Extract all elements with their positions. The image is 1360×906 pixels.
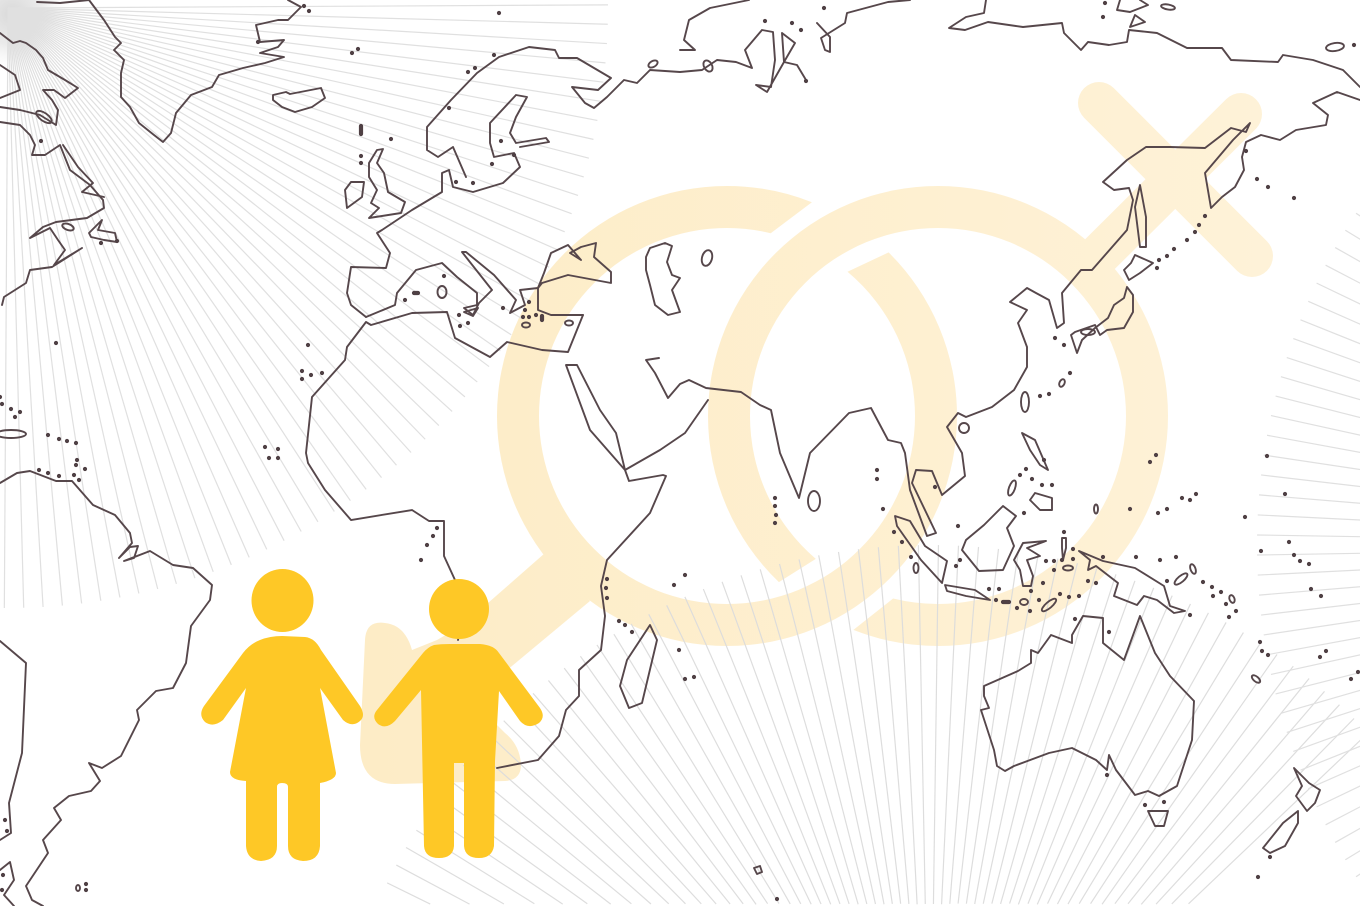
male symbol: [708, 103, 1252, 646]
man figure: [374, 579, 543, 858]
caspian sea: [646, 243, 680, 315]
radial lines fan: right: [1257, 197, 1360, 893]
iceland: [273, 88, 325, 112]
east asia coast with kamchatka: [646, 92, 1360, 536]
north america coast: [0, 0, 117, 305]
radial lines fan: bottom: [387, 545, 1360, 904]
female symbol: [360, 186, 957, 784]
arabia coast and africa east coast: [497, 365, 708, 768]
tasmania: [1148, 811, 1168, 826]
africa north and west coast: [306, 312, 583, 640]
australia: [981, 616, 1194, 796]
female and male symbols (background watermark): [360, 103, 1252, 784]
europe and northern russia coast: [347, 95, 549, 317]
new guinea: [1079, 551, 1185, 613]
japan, hokkaido and sakhalin: [1071, 185, 1153, 353]
greenland: [89, 0, 301, 142]
woman head: [252, 569, 314, 632]
woman body: [201, 636, 363, 861]
woman figure: [201, 569, 363, 861]
south america: [0, 471, 212, 906]
man body: [374, 644, 543, 858]
mediterranean north shore: [366, 243, 611, 317]
scandinavia and arctic russia: [427, 30, 806, 177]
indonesia and philippines: [895, 392, 1073, 613]
british isles: [345, 149, 405, 218]
man head: [429, 579, 489, 639]
top left corner shading: [0, 0, 80, 80]
radial lines fan: top left: [4, 5, 608, 608]
